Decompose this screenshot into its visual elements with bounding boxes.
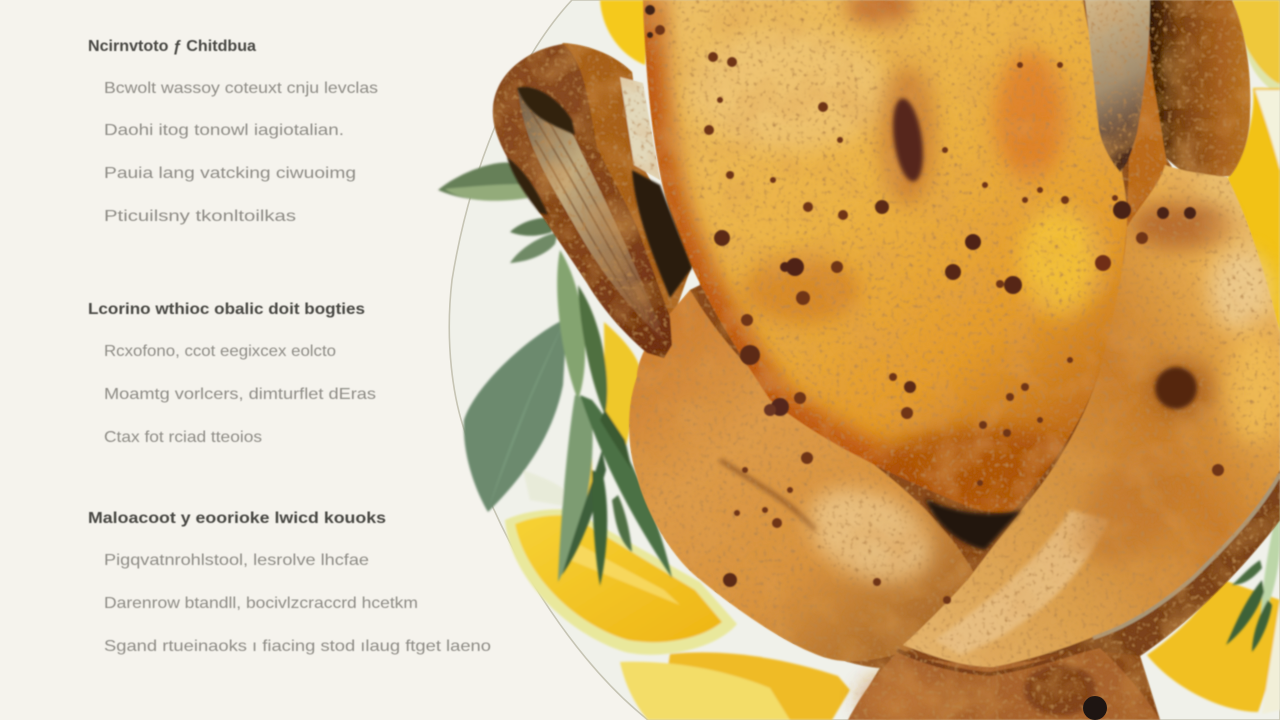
section 3 list: Darenrow btandll, bocivlzcraccrd hcetkm: [104, 595, 418, 612]
wing: front tip: [493, 44, 672, 358]
lemon: wedge bottom left: [505, 509, 737, 655]
rosemary sprig: [557, 250, 672, 586]
leaf: upper sage: [438, 163, 530, 200]
section 1 list: [104, 80, 378, 225]
section 1 heading: Ncirnvtoto ƒ Chitdbua: [88, 38, 256, 55]
herb: bottom right sprig: [1226, 495, 1280, 652]
lemon: top right: [1232, 0, 1280, 92]
wing: striations: [530, 110, 660, 330]
section 1 list: Bcwolt wassoy coteuxt cnju levclas: [104, 80, 378, 97]
lemon: bottom right: [1147, 578, 1280, 712]
lemon: top left: [600, 0, 652, 65]
plate: [449, 0, 1280, 720]
section 3 list: Sgand rtueinaoks ı fiacing stod ılaug ftget laeno: [104, 638, 491, 655]
drumstick: brown patches: [1132, 201, 1228, 249]
pale highlight under herbs: [523, 470, 576, 508]
section 2 list: Moamtg vorlcers, dimturflet dEras: [104, 386, 376, 403]
drumstick: bone end: [1083, 696, 1107, 720]
breast: [640, 0, 1140, 520]
leaf: small sage pair: [510, 218, 553, 236]
chicken: dark base silhouette: [634, 0, 1280, 720]
thigh: dark streak: [720, 460, 815, 530]
drumstick: pale streak: [935, 510, 1110, 655]
section 3 list: Pigqvatnrohlstool, lesrolve lhcfae: [104, 552, 369, 569]
text panel: [88, 38, 491, 655]
lemon: bottom back: [660, 652, 850, 720]
chicken: [493, 0, 1280, 720]
dark gap beside wing: [632, 170, 692, 298]
section 2 list: Rcxofono, ccot eegixcex eolcto: [104, 343, 336, 360]
drumstick: knuckle line: [897, 645, 1098, 674]
skin speckles: [645, 5, 1224, 604]
wing: top spike: [1085, 0, 1150, 172]
side of body beside spike: [1120, 0, 1170, 290]
breast: dark blotch: [888, 96, 928, 184]
leaf: large sage: [464, 318, 567, 512]
dark gap between breast and leg: [925, 498, 1022, 550]
drumstick: right: [903, 165, 1280, 667]
herbs: [438, 163, 1280, 652]
lemon: right middle: [1226, 88, 1280, 335]
drumstick: bottom: [848, 648, 1160, 720]
section 2 list: [104, 343, 376, 446]
section 2 list: Ctax fot rciad tteoios: [104, 429, 262, 446]
section 3 heading: Maloacoot y eoorioke lwicd kouoks: [88, 510, 386, 527]
wing: back right: [1148, 0, 1250, 178]
drumstick: dark blotch: [1155, 367, 1197, 409]
leg: underside band: [1000, 470, 1280, 660]
section 2 heading: Lcorino wthioc obalic doit bogties: [88, 301, 365, 318]
thigh: left: [629, 290, 975, 661]
thigh: pale inner: [793, 469, 947, 601]
wing: back shadow: [530, 43, 692, 320]
section 1 list: Daohi itog tonowl iagiotalian.: [104, 122, 344, 139]
section 1 list: Pticuilsny tkonltoilkas: [104, 208, 296, 225]
section 1 list: Pauia lang vatcking ciwuoimg: [104, 165, 356, 182]
lemon: bottom front: [620, 662, 790, 720]
lemon wedges: [505, 0, 1280, 720]
wing: dark shading: [507, 87, 575, 215]
lemon sliver behind herbs: [604, 322, 642, 450]
wing: bone highlight: [518, 90, 664, 340]
breast: left edge glow: [643, 0, 960, 503]
section 3 list: [104, 552, 491, 655]
breast: browning: [846, 0, 914, 24]
